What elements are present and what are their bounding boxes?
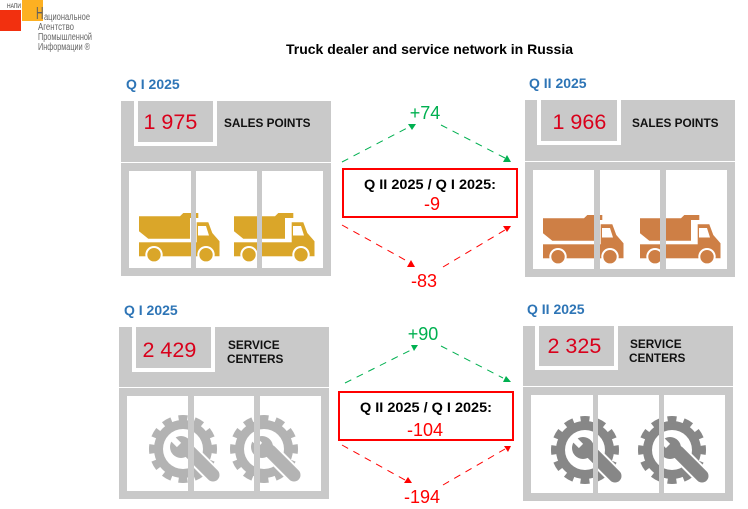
panel: service centers Q I 2025 <box>119 327 329 499</box>
title: Truck dealer and service network in Russia <box>286 41 573 57</box>
callout: net change service: -104 <box>407 420 443 440</box>
logo: Н <box>36 4 44 24</box>
callout: net change sales: Q II 2025 / Q I 2025: <box>364 176 496 192</box>
icon: truck 2 <box>640 215 720 265</box>
label: service centers Q II: CENTERS <box>629 351 686 365</box>
arrow: red down <box>342 445 412 483</box>
logo: Информации ® <box>38 41 90 53</box>
comparison: service centers <box>339 324 513 507</box>
logo: ациональное <box>44 12 90 23</box>
arrow: red up <box>443 446 511 485</box>
heading: Q II 2025 service: Q II 2025 <box>527 301 585 317</box>
arrow: green down <box>441 346 511 382</box>
logo <box>0 0 92 53</box>
label: service centers Q I <box>227 338 284 366</box>
label: service centers Q I: CENTERS <box>227 352 284 366</box>
icon: truck 1 <box>543 215 624 265</box>
panel: sales points Q I 2025 <box>121 101 331 276</box>
arrow: green up <box>345 345 418 383</box>
icon: truck 2 <box>234 213 314 263</box>
label: sales points Q I: SALES POINTS <box>224 116 311 130</box>
comparison: sales points <box>342 103 517 291</box>
icon: gear and wrench 2 <box>234 418 294 480</box>
value: sales points Q II: 1 966 <box>552 110 606 134</box>
value: plus 74: +74 <box>410 103 440 123</box>
callout: net change sales <box>343 169 517 217</box>
icon: gear and wrench 1 <box>554 420 616 480</box>
value: minus 83: -83 <box>411 271 437 291</box>
panel: service centers Q II 2025 <box>523 326 733 501</box>
value: service centers Q I: 2 429 <box>142 338 196 362</box>
logo: Агентство <box>38 22 74 33</box>
callout: net change service: Q II 2025 / Q I 2025: <box>360 399 492 415</box>
label: service centers Q I: SERVICE <box>228 338 280 352</box>
logo: Промышленной <box>38 32 92 43</box>
callout: net change sales: -9 <box>424 194 440 214</box>
label: service centers Q II <box>629 337 686 365</box>
arrow: red down <box>342 225 415 267</box>
label: service centers Q II: SERVICE <box>630 337 682 351</box>
arrow: green down <box>441 125 511 162</box>
value: minus 194: -194 <box>404 487 440 507</box>
callout: net change service <box>339 392 513 440</box>
arrow: green up <box>342 124 416 162</box>
value: service centers Q II: 2 325 <box>548 334 601 358</box>
icon: truck 1 <box>139 213 220 263</box>
icon: gear and wrench 1 <box>152 418 214 480</box>
value: sales points Q I: 1 975 <box>144 110 197 134</box>
label: sales points Q II: SALES POINTS <box>632 116 719 130</box>
arrow: red up <box>443 226 511 267</box>
heading: Q I 2025 service: Q I 2025 <box>124 302 178 318</box>
heading: Q II 2025 sales: Q II 2025 <box>529 75 587 91</box>
heading: Q I 2025 sales: Q I 2025 <box>126 76 180 92</box>
value: plus 90: +90 <box>408 324 438 344</box>
icon: gear and wrench 2 <box>642 420 702 480</box>
panel: sales points Q II 2025 <box>525 100 735 277</box>
logo: НАПИ <box>7 4 21 10</box>
